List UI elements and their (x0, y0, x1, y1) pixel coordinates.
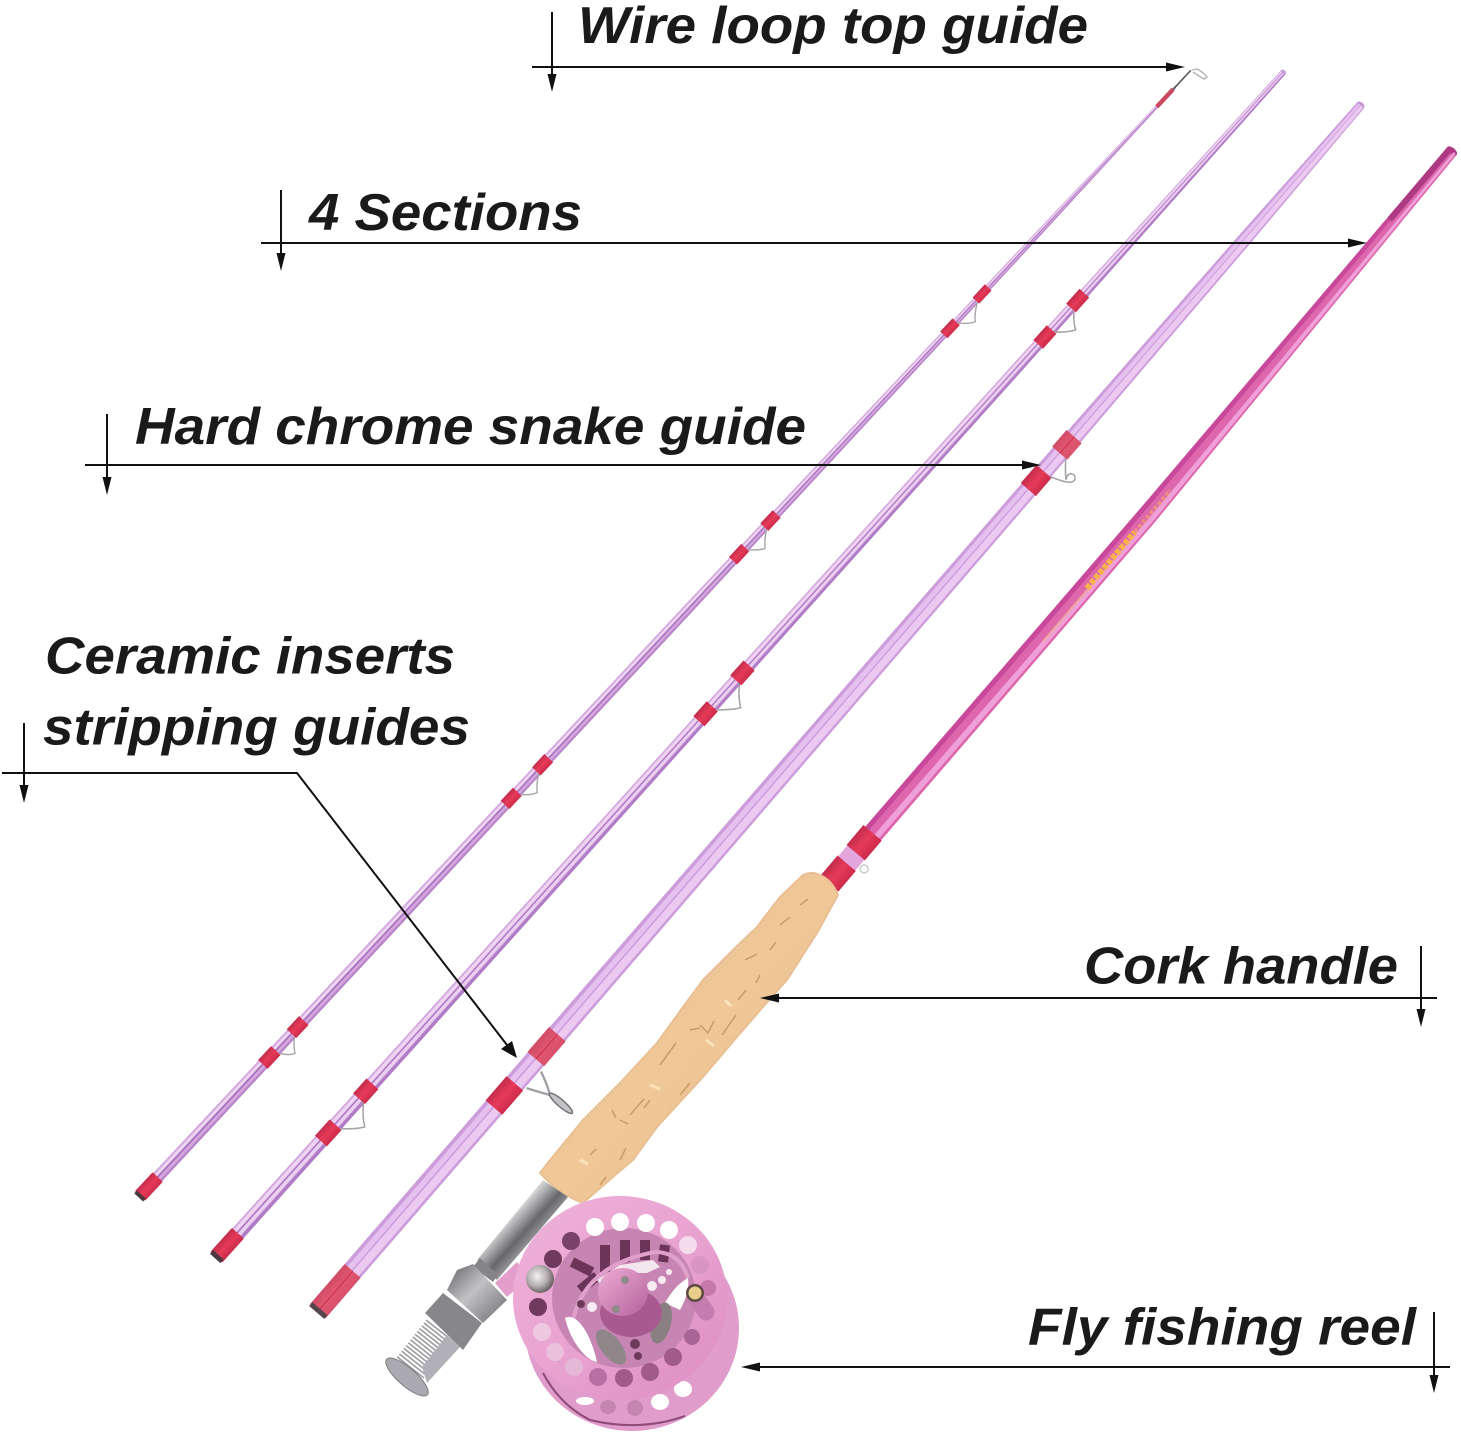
ribbed neck (473, 1258, 498, 1282)
annotation: wire loop top guide (532, 0, 1185, 92)
reel seat: silver tube, locking ring and butt cap (381, 1180, 568, 1402)
annotation: 4 sections: 4 Sections (308, 184, 582, 242)
annotation: ceramic inserts stripping guides: stripping guides (43, 698, 470, 756)
butt cap (381, 1352, 433, 1402)
lower silver shaft (422, 1335, 460, 1383)
handle with gold cap (686, 1284, 706, 1312)
rod section 4: pink butt section (820, 141, 1461, 897)
front rim (513, 1196, 727, 1400)
rod section 3 (308, 96, 1410, 1354)
annotation: fly fishing reel (741, 1298, 1450, 1393)
annotation: cork handle: Cork handle (1084, 938, 1398, 996)
icon: wire loop at top of tip section (1192, 69, 1207, 79)
inner chamber (552, 1228, 696, 1368)
centre hub with screws (598, 1268, 662, 1337)
spoke ring (573, 1252, 688, 1320)
silver collar (447, 1264, 507, 1323)
silver tube (477, 1180, 568, 1280)
line-guard teeth (572, 1240, 665, 1290)
large white slots (565, 1317, 597, 1362)
annotation: hard chrome snake guide: Hard chrome snake guide (135, 398, 806, 456)
rod section 2 (209, 65, 1302, 1274)
fly fishing reel (513, 1196, 739, 1431)
small spoke holes (587, 1269, 672, 1312)
reel back plate (525, 1225, 739, 1431)
pink reel foot (495, 1262, 529, 1297)
rim holes (529, 1213, 716, 1387)
annotation: ceramic inserts stripping guides (2, 628, 517, 1058)
rod brand print in gold (1087, 532, 1135, 588)
back holes (576, 1381, 692, 1416)
outline of spool cage (543, 1373, 685, 1425)
annotation: cork handle (760, 938, 1437, 1027)
rod section 1: thin tip section with wire loop top guide (134, 65, 1203, 1208)
annotation: ceramic inserts stripping guides: Ceramic inserts (45, 628, 455, 686)
annotation: 4 sections (261, 184, 1367, 271)
silver drag discs (590, 1324, 632, 1370)
annotation: fly fishing reel: Fly fishing reel (1028, 1298, 1418, 1356)
upper window (597, 1260, 660, 1287)
cork handle (540, 873, 838, 1203)
knurled locking ring (425, 1293, 482, 1350)
threaded shaft (410, 1330, 440, 1368)
silver ball knob (526, 1265, 554, 1293)
annotation: hard chrome snake guide (85, 398, 1041, 495)
